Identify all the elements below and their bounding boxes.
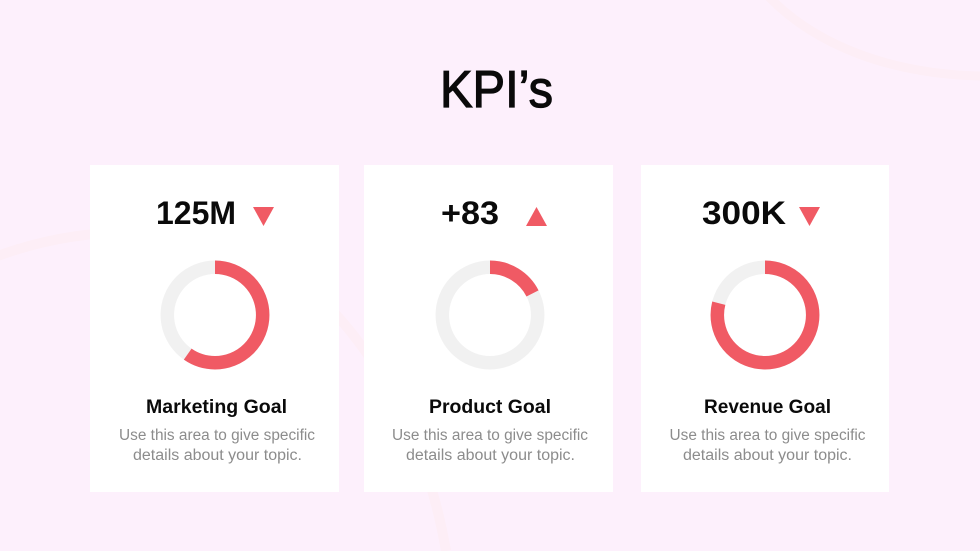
marketing description (119, 427, 315, 464)
panel: product goal (364, 165, 613, 492)
icon: up triangle (526, 207, 547, 226)
product donut chart (442, 267, 538, 363)
panel: marketing goal (90, 165, 339, 492)
icon: down triangle (799, 207, 820, 226)
product description: Use this area to give specific (392, 427, 588, 444)
revenue description (670, 427, 866, 464)
icon: down triangle (253, 207, 274, 226)
marketing heading: Marketing Goal (146, 397, 287, 418)
marketing description: Use this area to give specific (119, 427, 315, 444)
marketing value: 125M (156, 195, 236, 231)
revenue donut chart (717, 267, 813, 363)
revenue value: 300K (702, 195, 786, 231)
marketing description: details about your topic. (133, 447, 302, 464)
product value: +83 (441, 195, 499, 231)
revenue description: details about your topic. (683, 447, 852, 464)
marketing donut chart (167, 267, 263, 363)
revenue description: Use this area to give specific (670, 427, 866, 444)
panel: revenue goal (641, 165, 889, 492)
revenue heading: Revenue Goal (704, 397, 831, 418)
product description: details about your topic. (406, 447, 575, 464)
product heading: Product Goal (429, 397, 551, 418)
title: KPI’s (440, 61, 553, 119)
product description (392, 427, 588, 464)
